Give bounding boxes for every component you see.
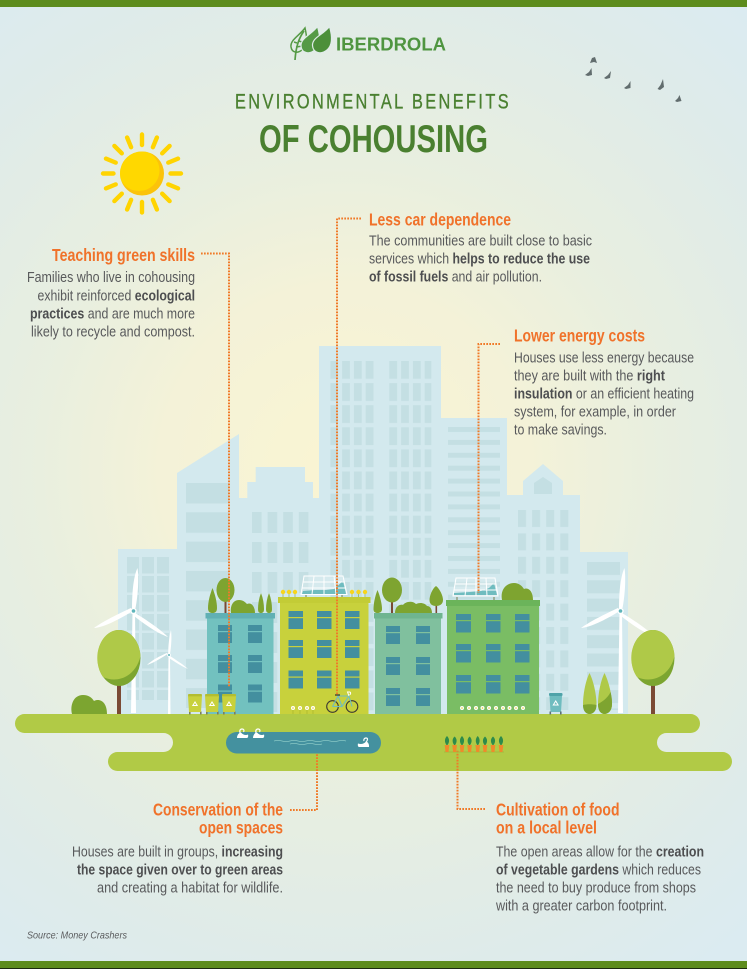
angled roof building: [177, 434, 239, 714]
text block: teaching green skills: [27, 245, 195, 340]
text block: conservation of the open spaces: the space given over to green areas: [77, 862, 283, 878]
roof: yellow building solar panel and flowers: [281, 576, 367, 597]
text block: lower energy costs: insulation or an efficient heating: [514, 386, 694, 402]
tall tower: [319, 346, 441, 714]
icon: swans: [237, 729, 369, 747]
top bar: [0, 0, 747, 7]
bottom bar: [0, 961, 747, 969]
dotted connector: teaching green skills: [201, 254, 229, 687]
wind turbine: right: [581, 568, 655, 713]
icon: bicycle: [327, 692, 358, 712]
roof: green building solar panel and bush: [453, 578, 533, 600]
building: yellow: [278, 597, 370, 714]
wind turbine: left small: [147, 630, 188, 714]
text block: lower energy costs: Houses use less energy because: [514, 350, 694, 366]
building: green: [446, 600, 540, 714]
dotted connector: lower energy costs: [478, 344, 500, 593]
title: OF COHOUSING: [259, 118, 488, 161]
text block: lower energy costs: to make savings.: [514, 422, 607, 438]
birds: [585, 57, 682, 102]
building right: [580, 552, 628, 714]
icon: carrots: [444, 736, 504, 752]
text block: less car dependence: of fossil fuels and air pollution.: [369, 270, 542, 286]
dotted connector: less car dependence: [337, 218, 361, 694]
gabled building: [507, 464, 580, 714]
text block: teaching green skills: Teaching green skills: [52, 245, 195, 265]
title: ENVIRONMENTAL BENEFITS: [235, 91, 509, 114]
text block: less car dependence: [369, 210, 592, 286]
roof plants: sage building: [374, 578, 443, 613]
dotted connector: cultivation of food: [458, 750, 485, 809]
text block: lower energy costs: Lower energy costs: [514, 326, 645, 346]
text block: cultivation of food on a local level: with a greater carbon footprint.: [495, 898, 667, 914]
icon: sun: [103, 134, 181, 212]
roof plants: teal building: [208, 578, 272, 613]
text block: cultivation of food on a local level: [495, 800, 704, 914]
text block: less car dependence: Less car dependence: [369, 210, 511, 230]
ground: [15, 714, 732, 771]
text block: teaching green skills: practices and are much more: [30, 306, 195, 322]
text block: less car dependence: services which helps to reduce the use: [369, 252, 590, 268]
text block: teaching green skills: Families who live in cohousing: [27, 270, 195, 286]
text block: conservation of the open spaces: Conservation of the: [153, 800, 283, 820]
building: sage green: [374, 613, 442, 714]
icon: teal recycling bin: [549, 693, 562, 714]
text block: lower energy costs: [514, 326, 694, 438]
text block: teaching green skills: exhibit reinforced ecological: [38, 288, 195, 304]
logo: Iberdrola: IBERDROLA: [336, 34, 446, 55]
text block: lower energy costs: system, for example, in order: [514, 404, 676, 420]
title: [235, 91, 509, 161]
text block: conservation of the open spaces: and creating a habitat for wildlife.: [97, 880, 283, 896]
text block: cultivation of food on a local level: of vegetable gardens which reduces: [496, 862, 701, 878]
tree and bush: left: [71, 630, 140, 714]
source note: Source: Money Crashers: [27, 930, 128, 942]
dotted connector: conservation of open spaces: [290, 750, 317, 810]
stepped building: [239, 467, 320, 714]
text block: lower energy costs: they are built with the right: [514, 368, 665, 384]
text block: conservation of the open spaces: [72, 800, 283, 896]
text block: cultivation of food on a local level: Cultivation of food: [496, 800, 620, 820]
text block: cultivation of food on a local level: on a local level: [496, 818, 597, 838]
text block: conservation of the open spaces: open spaces: [199, 818, 283, 838]
text block: cultivation of food on a local level: The open areas allow for the creation: [496, 844, 704, 860]
pond: [226, 732, 381, 754]
background city skyline: [118, 346, 628, 714]
wind turbine: left large: [94, 568, 168, 713]
icon: recycling bins: [188, 694, 236, 714]
cypress trees: right: [583, 673, 612, 714]
striped building: [441, 418, 507, 714]
text block: conservation of the open spaces: Houses are built in groups, increasing: [72, 844, 283, 860]
text block: teaching green skills: likely to recycle and compost.: [31, 324, 195, 340]
logo: Iberdrola: [291, 26, 446, 60]
tree: right: [631, 630, 674, 714]
low building left: [118, 549, 178, 714]
text block: cultivation of food on a local level: the need to buy produce from shops: [496, 880, 696, 896]
text block: less car dependence: The communities are built close to basic: [369, 234, 592, 250]
building: teal: [206, 613, 275, 714]
